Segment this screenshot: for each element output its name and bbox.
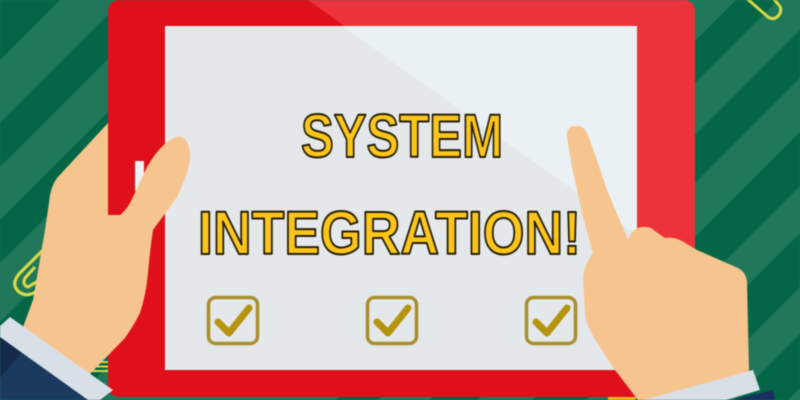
icon: paperclip bottom centre (608, 396, 636, 400)
icon: paperclip left (15, 249, 44, 295)
left cuff (0, 317, 113, 400)
left hand holding tablet (0, 123, 190, 400)
right hand (567, 126, 749, 400)
checkbox 1 (208, 298, 258, 344)
white tab behind left thumb (135, 161, 144, 191)
left sleeve (0, 336, 90, 400)
tablet screen (165, 26, 637, 370)
right cuff (643, 370, 760, 400)
icon: paperclip top right (744, 0, 781, 19)
right hand pointing (567, 126, 775, 400)
title: SYSTEM (301, 102, 503, 170)
tablet frame (108, 0, 695, 397)
checkbox 3 (526, 298, 576, 344)
title: INTEGRATION! (198, 199, 581, 267)
checkbox 2 (368, 298, 416, 344)
icon: paperclip bottom left (92, 362, 108, 371)
left hand (23, 123, 190, 374)
tablet (108, 0, 695, 397)
right sleeve (732, 390, 775, 400)
title (198, 102, 581, 267)
